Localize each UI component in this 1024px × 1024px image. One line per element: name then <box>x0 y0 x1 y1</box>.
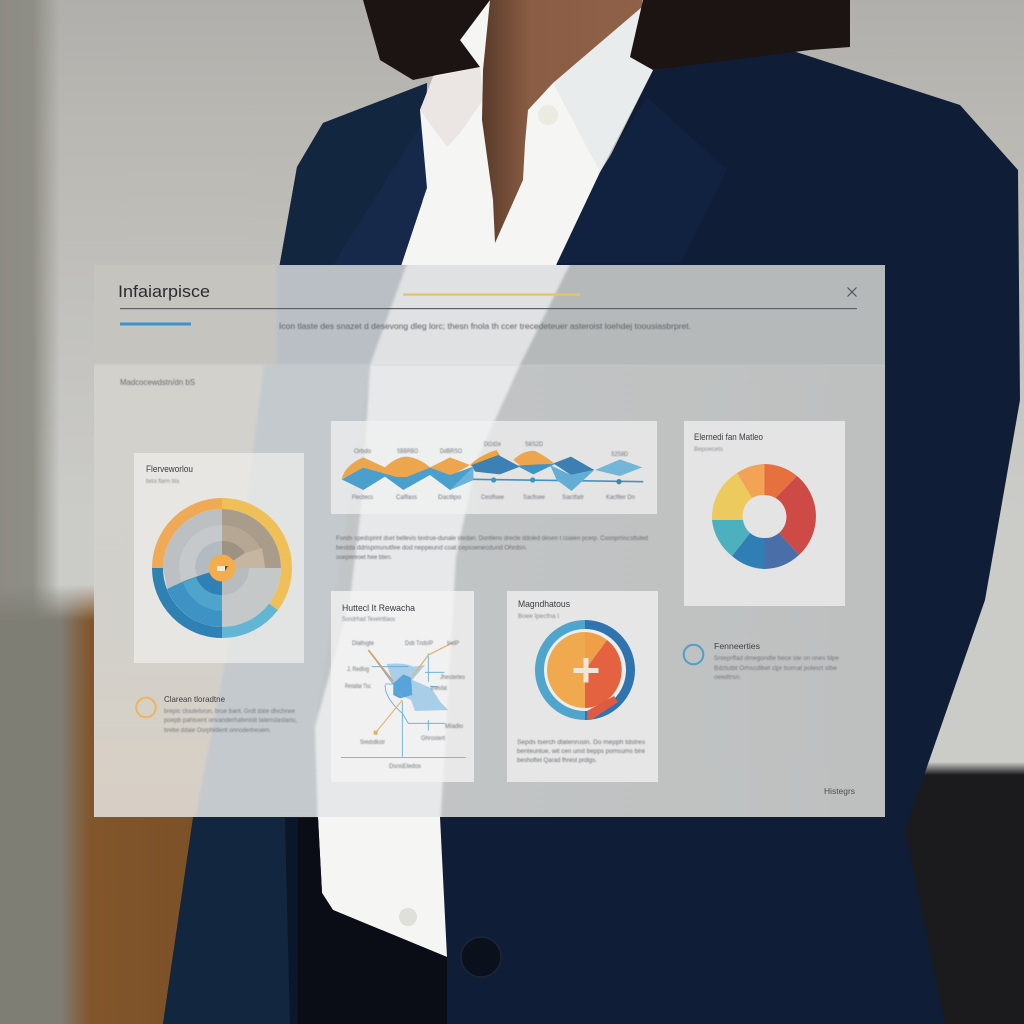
donut chart <box>712 464 816 569</box>
panel: ribbon wave chart card <box>331 421 657 514</box>
footer label: Histegrs <box>824 787 855 796</box>
paragraph: center text: ooepereoet hee bten. <box>336 554 392 561</box>
diagram labels: DsnsEtedos <box>389 763 421 770</box>
section label: Madcocewdstn/dn bS <box>120 378 195 387</box>
paragraph: center text <box>336 535 648 561</box>
card subtitle: Bepoecets <box>694 447 723 453</box>
wave chart labels: Cestfisee <box>481 495 505 501</box>
card title: Magndhatous <box>518 599 570 609</box>
network diagram <box>341 642 466 757</box>
panel: radial chart card <box>134 453 304 663</box>
diagram labels: Dob TndsIP <box>405 640 433 647</box>
callout: left note <box>136 694 297 734</box>
callout: left note: Clarean tloradtne <box>164 694 225 704</box>
shirt button <box>538 105 558 125</box>
header subtitle: Icon tlaste des snazet d desevong dleg lorc; thesn fnola th ccer trecedeteuer asteroist loehdej toousiasbrpret. <box>279 321 691 331</box>
shirt <box>318 0 653 957</box>
diagram labels: J, Redlog <box>347 666 369 673</box>
wave chart labels: Flecbecs <box>352 495 373 501</box>
wave chart labels: Sacfisee <box>523 495 546 501</box>
card subtitle: beta flarm bla <box>146 478 179 485</box>
card paragraph: Sepds tserch dlatenrusin. Do mepph tdstres <box>517 739 646 746</box>
diagram labels: Inesfat <box>431 685 447 692</box>
card paragraph <box>517 739 646 764</box>
callout: right note: Fenneerties <box>714 641 760 651</box>
radial chart <box>158 504 286 632</box>
wave chart labels: Orbdo <box>354 449 372 455</box>
blue accent line <box>120 322 191 326</box>
card title: Huttecl It Rewacha <box>342 603 416 613</box>
card paragraph: beshoftet Qarad fhrest prdigs. <box>517 757 597 764</box>
diagram labels: Jhestertes <box>440 674 465 681</box>
card subtitle: Boee Ipecfna I <box>518 613 559 620</box>
wave chart labels: Calflass <box>396 495 417 501</box>
card title: Flerveworlou <box>146 464 193 474</box>
card subtitle: Sondrhad Tevetrttlaos <box>342 616 396 623</box>
paragraph: center text: Fonds spedsprint dset bellevis textrue-dunale stedan. Dontlens drecte ddoled desen t coaien pcerp. Cooopmiscsttuted <box>336 535 648 542</box>
panel: network diagram card <box>331 591 474 782</box>
wave chart labels: DdBRSO <box>440 449 462 455</box>
wave chart labels: Sactfatr <box>562 495 584 501</box>
callout: right note: Bdztutbt Orhscdlbet clpr bornat polesrt stbe <box>714 665 837 672</box>
icon: close <box>848 288 856 296</box>
title: Infaiarpisce <box>118 283 210 301</box>
card paragraph: benteuntue, wit cen unst bepps pomsums bire <box>517 748 645 755</box>
wave chart labels: Dactlipo <box>438 495 462 501</box>
plus gauge chart <box>540 624 630 720</box>
wave chart labels: S2S8D <box>611 452 629 458</box>
neck skin <box>482 0 642 243</box>
wave chart labels: Dt2d2e <box>484 442 502 448</box>
callout: right note: Snteprffad dmegondte bece ste on ones blpe <box>714 655 839 662</box>
wave chart labels: Kacfiter Dn <box>606 495 635 501</box>
panel: see-through tints <box>60 250 885 830</box>
header rule <box>120 308 857 309</box>
diagram labels: Sredstlkstr <box>360 739 385 746</box>
icon: yellow ring <box>136 698 156 717</box>
wave chart labels <box>352 442 635 501</box>
translucent infographic panel <box>60 250 885 830</box>
panel: plus gauge card <box>507 591 658 782</box>
wave chart labels: S8S2D <box>525 442 544 448</box>
callout: left note: brepic cloutelsrun, brue bant. Grdt date dlvchrwe <box>164 708 295 715</box>
paragraph: center text: bestda ddrispmsnutfee dod neppeund coat cepssenecdund Ohrdsn. <box>336 544 527 552</box>
panel: donut chart card <box>684 421 845 606</box>
callout: left note: poepb pahtuent onvanderhafenisti tatenstaslariu, <box>164 717 297 724</box>
callout: left note: brebe ddaie Oorphldient onnodertreoem. <box>164 727 271 734</box>
jacket <box>163 50 1020 1024</box>
callout: right note: oeedtrsn. <box>714 674 741 681</box>
collar shading <box>553 7 653 172</box>
diagram labels: Restaltar Tlsc <box>345 683 371 690</box>
panel: body background <box>94 365 885 817</box>
ribbon wave chart <box>342 450 643 491</box>
icon: blue ring <box>684 645 703 664</box>
diagram labels: Dlaltsgte <box>352 640 374 647</box>
wave chart labels: SBBRBO <box>397 449 418 455</box>
diagram labels: Mladio <box>445 723 463 730</box>
callout: right note <box>684 641 839 681</box>
diagram labels: Ghrostert <box>421 735 445 742</box>
panel: header background <box>94 265 885 365</box>
jacket button <box>461 937 501 977</box>
yellow accent line <box>403 294 580 296</box>
hair <box>363 0 490 80</box>
trousers <box>298 818 447 1024</box>
card title: Elernedi fan Matleo <box>694 432 763 442</box>
diagram labels: IndP <box>447 640 459 647</box>
diagram labels <box>345 640 465 770</box>
